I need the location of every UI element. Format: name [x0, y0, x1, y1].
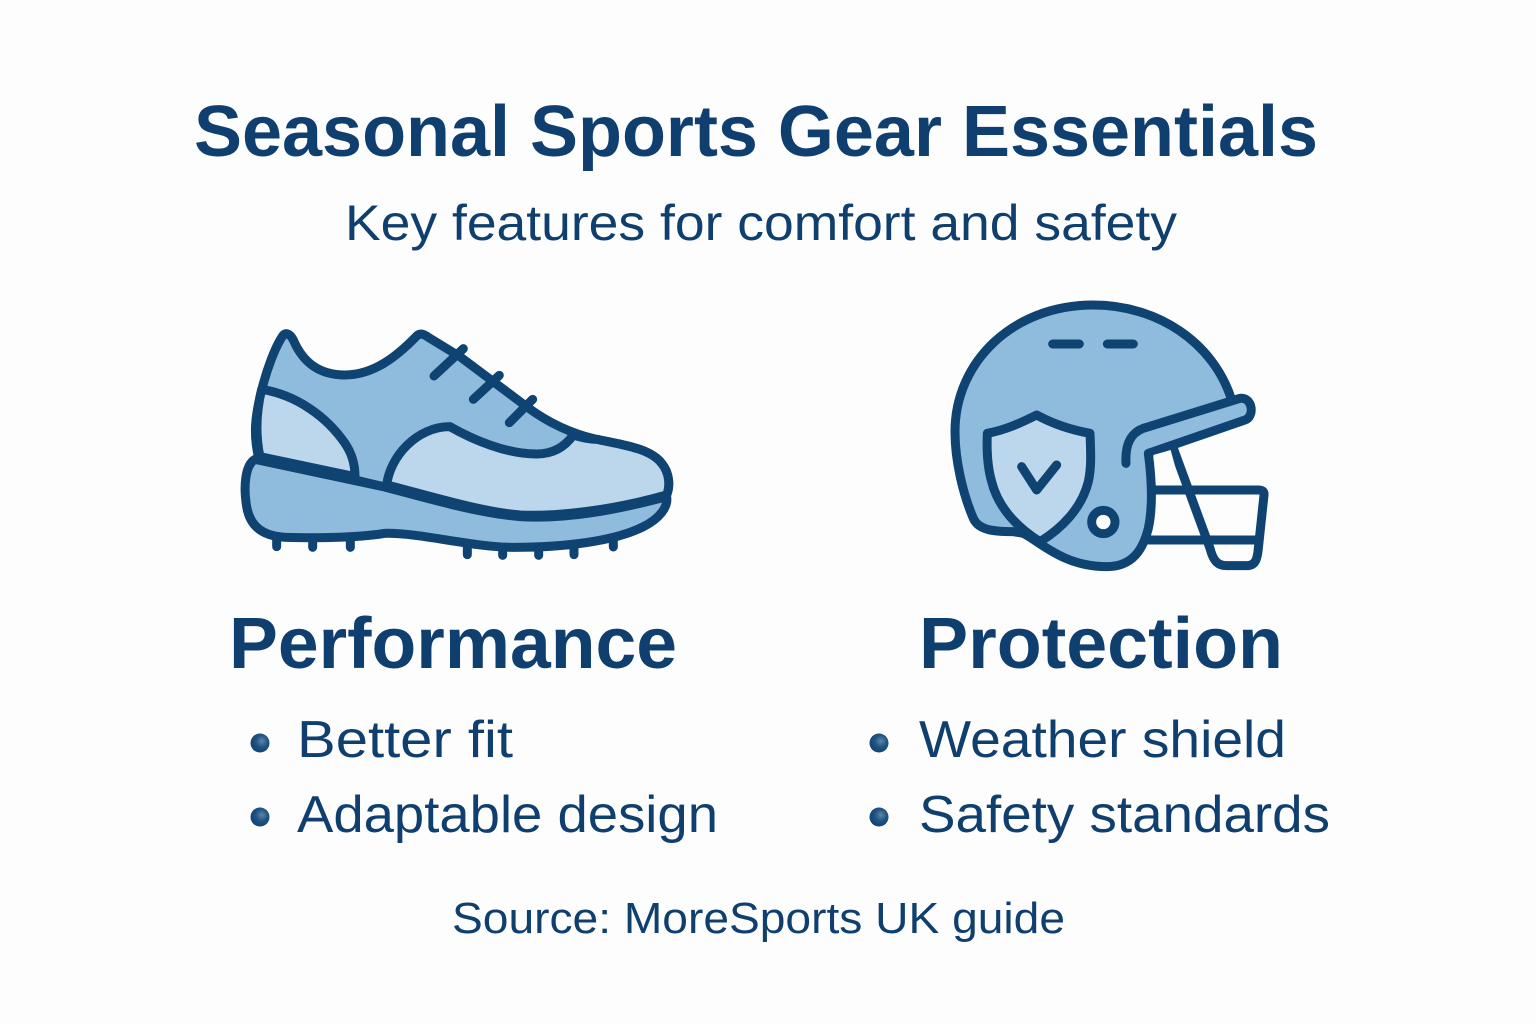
icon: sports shoe — [245, 334, 669, 555]
list: protection — [870, 711, 1330, 844]
cleats — [277, 540, 613, 555]
bullet — [870, 808, 888, 826]
vents — [1053, 330, 1133, 357]
item: adaptable design: Adaptable design — [297, 786, 718, 844]
laces — [434, 349, 533, 423]
sole — [245, 459, 667, 547]
icon: football helmet with shield — [955, 305, 1264, 567]
heading: performance: Performance — [229, 604, 677, 684]
face mask — [1148, 448, 1264, 566]
shoe upper — [255, 334, 669, 517]
shield — [987, 415, 1091, 542]
heel panel — [257, 389, 355, 477]
item: weather shield: Weather shield — [919, 711, 1286, 769]
helmet shell — [955, 305, 1251, 567]
subtitle: Key features for comfort and safety — [345, 195, 1177, 251]
toe panel — [387, 427, 669, 515]
title: Seasonal Sports Gear Essentials — [194, 92, 1318, 172]
item: safety standards: Safety standards — [919, 786, 1330, 844]
bullet — [250, 808, 270, 826]
ear hole — [1092, 510, 1115, 534]
list: performance — [250, 711, 718, 844]
heading: protection: Protection — [919, 604, 1283, 684]
check mark — [1022, 465, 1057, 490]
bullet — [250, 734, 270, 752]
source note: Source: MoreSports UK guide — [452, 894, 1065, 943]
visor gap — [1153, 450, 1180, 484]
bullet — [870, 734, 888, 752]
item: better fit: Better fit — [297, 711, 514, 769]
